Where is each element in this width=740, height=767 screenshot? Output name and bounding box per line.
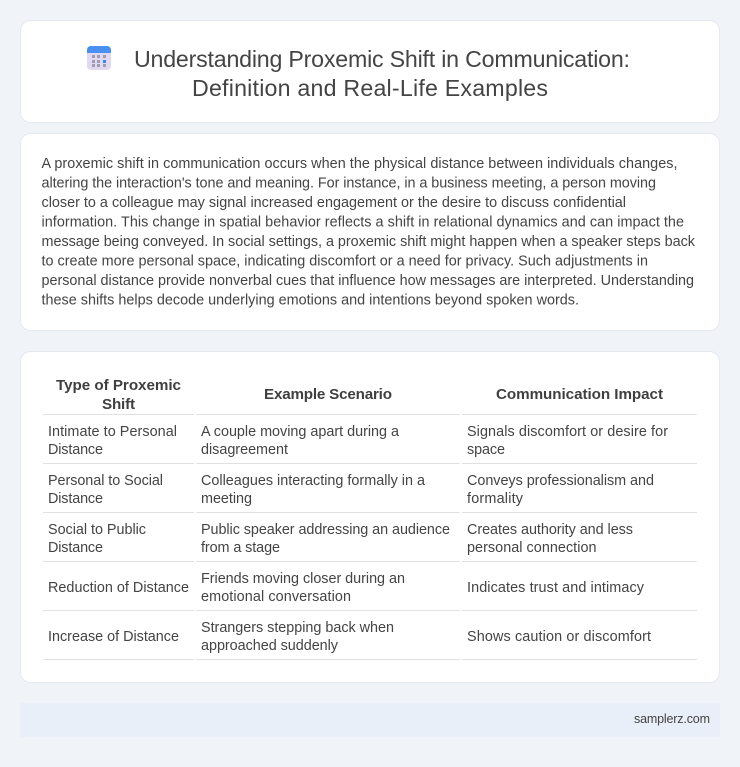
table row: reduction of distance: Friends moving closer during an: [201, 571, 405, 587]
title: Definition and Real-Life Examples: [192, 75, 548, 101]
table row: increase of distance: Strangers stepping back when: [201, 620, 394, 636]
table row: social to public: from a stage: [201, 540, 280, 556]
table row: social to public: Creates authority and less: [467, 522, 633, 538]
table row: personal to social: [48, 473, 654, 507]
text block: description paragraph: [42, 156, 696, 308]
text block: description paragraph: personal distance provide nonverbal cues that influence how messages are interpreted. Understanding: [42, 273, 694, 289]
title: [134, 46, 630, 101]
table row: reduction of distance: [48, 571, 645, 605]
text block: description paragraph: A proxemic shift in communication occurs when the physical distance between individuals changes,: [42, 156, 678, 172]
panel: table: [20, 352, 720, 682]
table row: increase of distance: Shows caution or discomfort: [467, 629, 651, 645]
table row: personal to social: formality: [467, 491, 524, 507]
table row: intimate to personal: space: [467, 442, 505, 458]
table row: increase of distance: [48, 620, 651, 654]
table row: personal to social: meeting: [201, 491, 252, 507]
footer: [20, 703, 720, 737]
text block: description paragraph: altering the interaction's tone and meaning. For instance, in a business meeting, a person moving: [42, 176, 656, 192]
table header: [56, 377, 663, 413]
table row: intimate to personal: [48, 424, 668, 458]
table header: Example Scenario: [264, 386, 392, 403]
table row: reduction of distance: Reduction of Distance: [48, 580, 189, 596]
table row: intimate to personal: A couple moving apart during a: [201, 424, 399, 440]
title: Understanding Proxemic Shift in Communication:: [134, 46, 630, 72]
text block: description paragraph: these shifts helps decode underlying emotions and intentions beyond spoken words.: [42, 292, 579, 308]
table header: Type of Proxemic: [56, 377, 181, 394]
text block: description paragraph: to create more personal space, indicating discomfort or a need for privacy. Such adjustments in: [42, 254, 648, 270]
table row: personal to social: Conveys professionalism and: [467, 473, 654, 489]
table row: reduction of distance: Indicates trust and intimacy: [467, 580, 645, 596]
table row: social to public: Public speaker addressing an audience: [201, 522, 450, 538]
panel: header: [20, 20, 720, 122]
table row: intimate to personal: Intimate to Personal: [48, 424, 177, 440]
table row: intimate to personal: disagreement: [201, 442, 288, 458]
table row: social to public: Distance: [48, 540, 103, 556]
table row: increase of distance: Increase of Distance: [48, 629, 179, 645]
panel: description: [20, 134, 720, 330]
text block: description paragraph: information. This change in spatial behavior reflects a shift in relational dynamics and can impact the: [42, 214, 684, 230]
text block: description paragraph: message being conveyed. In social settings, a proxemic shift might happen when a speaker steps back: [42, 234, 696, 250]
table row: social to public: [48, 522, 633, 556]
text block: description paragraph: closer to a colleague may signal increased engagement or the desire to discuss confidential: [42, 195, 626, 211]
table row: social to public: Social to Public: [48, 522, 146, 538]
table row: intimate to personal: Signals discomfort or desire for: [467, 424, 668, 440]
icon: calendar: [87, 46, 111, 70]
table row: social to public: personal connection: [467, 540, 596, 556]
table row: personal to social: Colleagues interacting formally in a: [201, 473, 425, 489]
table row: increase of distance: approached suddenly: [201, 638, 339, 654]
table row: reduction of distance: emotional conversation: [201, 589, 351, 605]
footer: samplerz.com: [634, 712, 710, 726]
table header: Communication Impact: [496, 386, 663, 403]
table row: personal to social: Personal to Social: [48, 473, 163, 489]
table row: personal to social: Distance: [48, 491, 103, 507]
table header: Shift: [102, 396, 135, 413]
table row: intimate to personal: Distance: [48, 442, 103, 458]
